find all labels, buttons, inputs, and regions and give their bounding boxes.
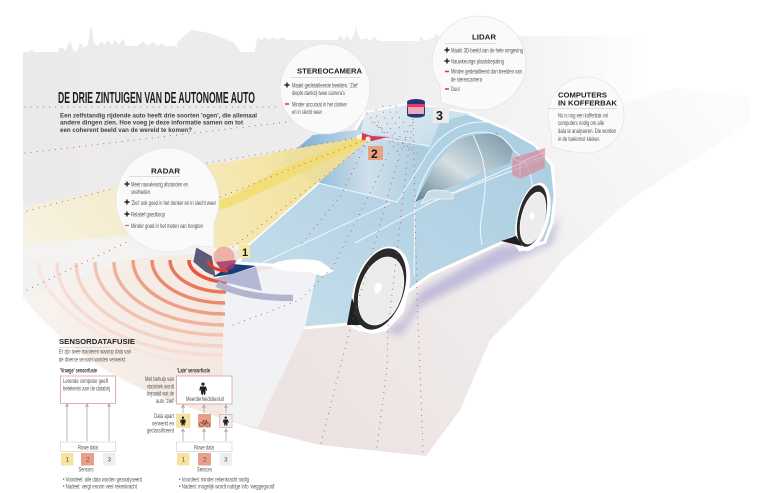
plus item: afstanden: snelheden <box>131 189 150 196</box>
car body shell <box>238 104 555 330</box>
diagram: late fusion: • Nadeel: mogelijk wordt nuttige info 'weggegooid' <box>179 484 275 490</box>
diagram: late fusion: • Voordeel: minder rekenkracht nodig <box>179 476 249 484</box>
diagram: late fusion: bepaald wat de <box>147 390 174 398</box>
headlight <box>270 259 334 276</box>
diagram: late fusion: Sensors <box>197 466 212 474</box>
title: DE DRIE ZINTUIGEN VAN DE AUTONOME AUTO <box>58 90 255 107</box>
panel: sensordatafusie <box>59 337 275 490</box>
diagram: late fusion: Met behulp van <box>145 376 174 383</box>
plus item <box>284 82 358 97</box>
dark grille <box>193 247 216 277</box>
plus item: donker: 'Ziet' ook goed in het donker en in slecht weer <box>131 200 217 207</box>
roof glare <box>360 104 470 147</box>
computers body text: computers nodig om alle <box>558 120 604 127</box>
diagram: late fusion: 'Late' sensorfusie <box>177 368 210 374</box>
inner red wave <box>208 260 228 271</box>
background: grey skyline panel <box>23 27 650 298</box>
intro text: een coherent beeld van de wereld te komen? <box>60 127 192 134</box>
icon: bicycle <box>200 420 210 426</box>
plus item: diepte dankzij twee camera's <box>292 90 345 97</box>
plus item: 3D: Maakt 3D-beeld van de hele omgeving <box>451 48 523 54</box>
panel: radar callout <box>116 148 219 252</box>
rim <box>350 251 412 331</box>
diagram: late fusion: verwerkt en <box>152 420 174 428</box>
sensor intro: Er zijn twee manieren waarop data van <box>59 348 131 356</box>
road surface <box>23 88 750 456</box>
plus item: plaatsbepaling: Nauwkeurige plaatsbepaling <box>451 58 504 66</box>
diagram: early fusion: Sensors <box>78 466 94 474</box>
icon: person grey <box>223 416 229 426</box>
plus item: afstanden <box>124 182 188 196</box>
wheel white backing <box>341 239 421 341</box>
peach road part under radar waves <box>23 252 224 418</box>
minus item: detail: de stereocamera <box>451 76 482 84</box>
wedge <box>347 298 362 325</box>
light beam: stereocamera fan <box>23 137 368 248</box>
plus item: Maakt gedetailleerde beelden. 'Ziet' <box>292 82 358 90</box>
navy air intake <box>213 264 256 277</box>
intro text: Een zelfstandig rijdende auto heeft drie soorten 'ogen', die allemaal <box>60 112 257 120</box>
label 1: 1 <box>242 247 248 259</box>
label 3: 3 <box>436 109 443 123</box>
computers body text: data te analyseren. Die worden <box>558 128 616 135</box>
diagram: late fusion: Rowe data <box>194 444 214 452</box>
wing mirror <box>421 190 453 204</box>
translucent bumper <box>223 263 318 428</box>
icon: computers box in trunk <box>512 148 545 179</box>
diagram: early fusion <box>60 368 142 490</box>
rear wedge <box>501 236 522 246</box>
diagram: late fusion: 2 <box>203 456 207 464</box>
diagram: late fusion <box>145 368 275 490</box>
panel: computers callout <box>548 77 624 153</box>
diagram: late fusion: statistiek wordt <box>147 384 174 390</box>
minus item: hoogten: Minder goed in het meten van hoogten <box>131 223 203 230</box>
computers body text <box>558 112 616 143</box>
fade of the panel under the beam <box>23 196 240 298</box>
label 2: 2 <box>371 147 378 161</box>
diagram: late fusion: 3 <box>224 456 228 464</box>
purple band <box>217 284 293 298</box>
rear wheel <box>501 179 557 255</box>
icon: person large <box>199 382 207 395</box>
minus item: detail: Minder gedetailleerd dan beelden van <box>451 68 522 76</box>
rear tyre <box>511 182 553 250</box>
diagram: early fusion: betekenis aan de databrij <box>63 386 110 392</box>
peach sensor circle <box>214 246 234 268</box>
body lines <box>258 122 547 276</box>
diagram: early fusion: • Nadeel: vergt enorm veel rekenkracht <box>63 484 137 490</box>
car body <box>238 104 555 330</box>
window glass <box>415 133 513 202</box>
camera lens glow <box>356 134 362 140</box>
diagram: early fusion: 3 <box>108 456 112 464</box>
minus item: detail <box>445 68 522 84</box>
icon: lidar cylinder <box>407 99 425 118</box>
label 1 <box>239 245 250 259</box>
icon: person yellow <box>180 416 186 426</box>
diagram: early fusion: Rowe data <box>78 444 98 452</box>
diagram: early fusion: 1 <box>66 456 70 464</box>
diagram: late fusion: geclassificeerd <box>147 428 174 434</box>
intro text: andere dingen zien. Hoe voeg je deze informatie samen om tot <box>60 120 244 126</box>
sensor intro <box>59 348 131 364</box>
bright yellow central beam <box>219 138 368 210</box>
panel: stereocamera callout <box>280 44 370 134</box>
panel: lidar callout <box>432 16 526 110</box>
dotted sensor lines <box>25 106 423 452</box>
label 3 <box>433 107 449 123</box>
computers body text: in de toekomst kleiner. <box>558 136 600 143</box>
minus item: en in slecht weer <box>292 109 323 116</box>
intro text <box>60 112 257 134</box>
diagram: early fusion: • Voordeel: alle data worden geanalyseerd <box>63 476 142 484</box>
rear rim <box>515 190 551 246</box>
camera red wedge <box>362 133 388 141</box>
diagram: late fusion: Data apart <box>154 413 174 420</box>
sensor intro: de diverse sensors worden verwerkt: <box>59 356 126 364</box>
panel: computers callout: IN KOFFERBAK <box>558 98 618 108</box>
heading: sensordatafusie: SENSORDATAFUSIE <box>59 337 135 346</box>
rear white backing <box>509 179 557 255</box>
diagram: early fusion: 'Vroege' sensorfusie <box>60 368 97 374</box>
minus item: duur: Duur <box>451 86 461 93</box>
radar sensor: front grille <box>193 246 293 298</box>
purple lower spoiler <box>214 267 262 291</box>
diagram: early fusion: 2 <box>86 456 90 464</box>
plus item: afstanden: Meet nauwkeurig afstanden en <box>131 182 188 188</box>
diagram: late fusion: Meerderheidsbesluit <box>186 396 224 403</box>
front wheel <box>341 239 421 341</box>
car shadow <box>385 215 560 336</box>
magenta sensor shape <box>216 260 236 272</box>
computers body text: Nu is nog een kofferbak vol <box>558 112 608 120</box>
heading: radar: RADAR <box>151 166 181 176</box>
heading: lidar: LIDAR <box>472 32 497 42</box>
label 2 <box>368 146 383 161</box>
diagram: early fusion: Lerende computer geeft <box>63 378 108 385</box>
diagram: late fusion: auto 'ziet' <box>156 398 174 405</box>
windshield <box>277 130 430 202</box>
plus item: goedkoop: Relatief goedkoop <box>131 212 165 218</box>
heading: computers: COMPUTERS <box>558 90 607 100</box>
heading: stereocamera: STEREOCAMERA <box>297 66 363 76</box>
diagram: late fusion: 1 <box>182 456 186 464</box>
stereocamera sensor <box>356 133 388 142</box>
minus item: Minder accuraat in het donker <box>292 102 348 108</box>
radar waves <box>38 260 227 362</box>
tyre <box>344 242 416 336</box>
minus item <box>285 102 348 116</box>
